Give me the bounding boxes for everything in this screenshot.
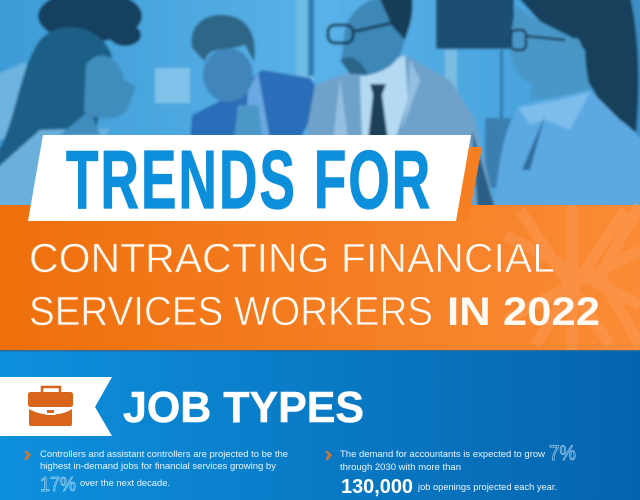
text block: accountants — [340, 442, 576, 498]
text block: controllers: Controllers and assistant controllers are projected to be the — [40, 449, 288, 459]
number: 17 percent: 17% — [40, 474, 76, 496]
subtitle: IN 2022 — [447, 290, 600, 334]
watermark star pattern — [505, 205, 640, 350]
title: trends for: TRENDS FOR — [66, 133, 430, 226]
subtitle — [29, 235, 600, 334]
icon: bullet chevron left — [24, 451, 31, 460]
icon: briefcase — [28, 387, 73, 426]
text block: accountants: through 2030 with more than — [340, 462, 461, 472]
subtitle: CONTRACTING FINANCIAL — [29, 235, 555, 281]
text block: controllers — [40, 449, 288, 496]
photo person: man in blue suit looking down — [190, 15, 322, 140]
number: 130,000: 130,000 — [341, 476, 413, 498]
photo: four colleagues talking, blue tint — [0, 0, 640, 220]
photo person: woman on the left — [0, 27, 136, 215]
photo person: woman with glasses on the right — [494, 0, 640, 215]
text block: accountants: The demand for accountants is expected to grow — [340, 449, 545, 459]
text block: accountants: job openings projected each year. — [417, 482, 557, 492]
text block: controllers: over the next decade. — [80, 478, 170, 488]
subtitle: SERVICES WORKERS — [29, 288, 433, 334]
panel: job types — [0, 350, 640, 500]
photo person: background colleague with curly hair — [0, 0, 142, 140]
white banner with title — [28, 133, 471, 226]
orange title band — [0, 205, 640, 350]
text block: controllers: highest in-demand jobs for financial services growing by — [40, 461, 276, 471]
ribbon — [0, 377, 112, 436]
heading: job types: JOB TYPES — [123, 383, 364, 432]
number: 7 percent: 7% — [549, 442, 576, 465]
orange accent behind white banner — [447, 147, 482, 221]
photo person: man with glasses in grey suit — [305, 0, 497, 215]
icon: bullet chevron right — [325, 451, 332, 460]
